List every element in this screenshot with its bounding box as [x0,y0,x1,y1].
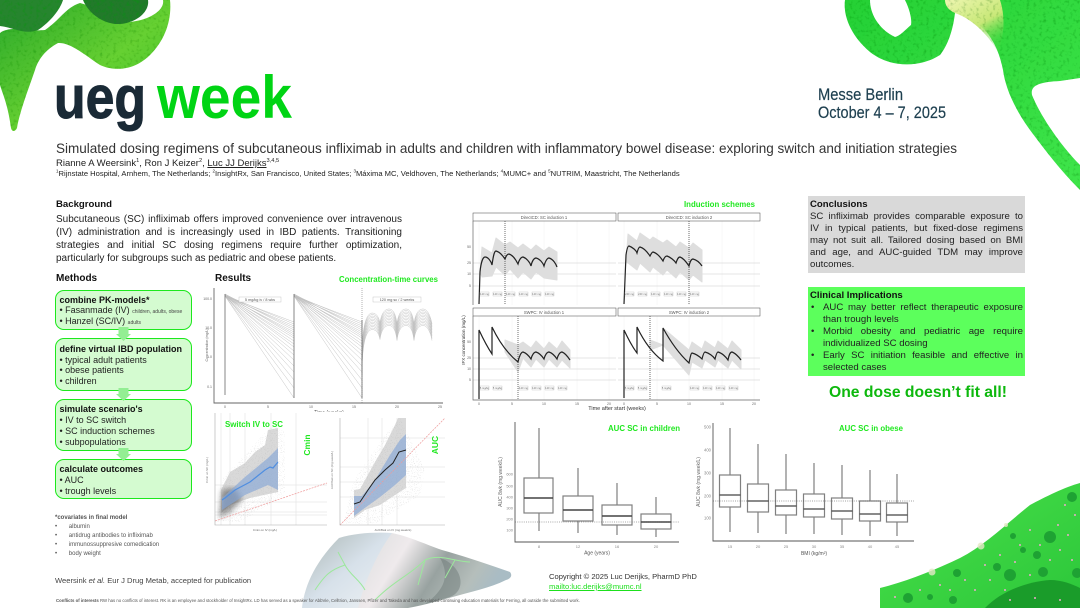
chart: induction schemes: 10 [542,402,546,406]
chart: induction schemes: 120 mg [532,386,541,390]
chart: induction schemes: 120 mg [690,292,699,296]
method step: combine PK-models: combine PK-models* [60,295,150,305]
decoration: top-left green form [0,0,170,131]
chart: induction schemes: 10 [687,402,691,406]
chart: concentration-time curves: 25 [438,405,442,409]
chart: induction schemes: 15 [720,402,724,406]
panel: clinical implications: • [811,350,814,361]
chart: induction schemes: 240 mg [638,292,647,296]
chart: induction schemes: 120 mg [729,386,738,390]
chart: induction schemes: 15 [575,402,579,406]
chart: induction schemes: 120 mg [716,386,725,390]
panel: background: Background [56,199,112,210]
citation: Weersink et al. Eur J Drug Metab, accepted for publication [55,576,251,585]
covariates note: *covariates in final model [55,515,127,521]
chart: induction schemes: 25 [467,356,471,360]
chart: induction schemes: 120 mg [664,292,673,296]
panel: clinical implications: individualized SC dosing [823,338,928,349]
chart: concentration-time curves: Concentration (mg/L) [205,329,209,361]
panel: background: Subcutaneous (SC) infliximab offers improved convenience over intravenous [56,214,402,224]
method step: combine PK-models: • Hanzel (SC/IV) adults [60,316,141,326]
chart: AUC SC in children boxplot: 500 [506,484,514,488]
tagline: One dose doesn’t fit all! [829,384,1007,401]
method step: simulate scenarios: • SC induction schemes [60,426,155,436]
panel: conclusions: and age, and AUC-guided TDM may improve [810,247,1023,258]
chart: AUC SC in obese boxplot: AUC 8wk (mg.week/L) [696,457,702,507]
chart: AUC SC in children boxplot: 400 [506,494,514,500]
panel: conclusions: IV in typical patients, but fixed-dose regimens [810,223,1023,234]
method step: calculate outcomes: • trough levels [60,486,116,496]
chart: induction schemes: Time after start (weeks) [588,406,646,412]
panel: background [56,199,402,264]
chart: concentration-time curves: Time (weeks) [314,410,344,416]
chart: induction schemes: 5 mg/kg [662,386,672,390]
chart: Cmin scatter [205,413,327,532]
chart: induction schemes: 5 mg/kg [480,386,490,390]
label: AUC SC in obese: AUC SC in obese [839,424,904,433]
chart: induction schemes: 50 [467,245,471,249]
method step: simulate scenarios: • subpopulations [60,437,126,447]
copyright: Copyright © 2025 Luc Derijks, PharmD PhD [549,572,697,581]
chart: AUC SC in obese boxplot: BMI (kg/m²) [801,551,827,557]
label: switch IV to SC: Switch IV to SC [225,420,283,429]
chart: induction schemes: 5 mg/kg [638,386,648,390]
chart: induction schemes: 0 [478,402,480,406]
chart: induction schemes: 0 [623,402,625,406]
chart: concentration-time curves: 120 mg sc / 2 weeks [380,298,414,302]
chart: induction schemes: DirectCD: SC induction 1 [521,215,568,220]
chart: Cmin scatter: Cmin on IV (mg/L) [253,528,277,532]
chart: induction schemes: 5 mg/kg [625,386,635,390]
chart: AUC SC in obese boxplot: 35 [840,544,845,549]
chart: induction schemes: IFX concentration (mg/L) [461,315,466,365]
panel: clinical implications: Morbid obesity and pediatric age require [823,326,1023,337]
chart: AUC SC in obese boxplot: 500 [704,424,712,430]
chart: concentration-time curves: 10 [309,405,313,409]
title: Simulated dosing regimens of subcutaneous infliximab in adults and children with inflammatory bowel disease: exploring switch and initiation strategies [56,140,957,156]
chart: AUC SC in obese boxplot: 40 [868,544,873,549]
chart: induction schemes: 10 [467,367,471,371]
panel: clinical implications [808,287,1025,376]
panel: background: strategies and initial SC dosing regimens require further optimization, [56,240,402,251]
chart: AUC SC in obese boxplot: 200 [704,494,712,498]
label: concentration-time curves: Concentration-time curves [339,275,439,284]
chart: AUC SC in obese boxplot: 45 [895,544,900,549]
decoration: bottom-right green form [880,483,1080,608]
panel: clinical implications: selected cases [823,362,886,373]
chart: induction schemes: 240 mg [625,292,634,296]
contact link: mailto:luc.derijks@mumc.nl [549,582,642,591]
chart: induction schemes: 120 mg [519,292,528,296]
chart: AUC SC in children boxplot: 20 [654,544,659,549]
chart: AUC SC in children boxplot: Age (years) [584,550,610,556]
chart: induction schemes: SWPC: IV induction 2 [669,310,710,315]
panel: conclusions [808,196,1025,273]
chart: concentration-time curves: 10.0 [205,326,212,330]
panel: clinical implications: • [811,302,814,313]
chart: induction schemes: 120 mg [532,292,541,296]
method step: define population [55,338,192,391]
venue and date: Messe Berlin [818,86,903,104]
decoration: liver illustration [302,533,511,608]
logo: ueg week: ueg [54,64,146,131]
panel: conclusions: may not suit all. Tailored dosing based on BMI [810,235,1023,246]
method step: define population: • children [60,376,97,386]
chart: AUC scatter [330,413,445,532]
panel: clinical implications: Early SC initiation feasible and effective in [823,350,1023,361]
method step: combine PK-models [55,290,192,330]
decoration: top-right green form [845,0,1080,190]
chart: AUC SC in obese boxplot: 15 [728,544,733,549]
chart: AUC SC in obese boxplot: 30 [812,544,817,549]
panel: clinical implications: • [811,326,814,337]
panel: conclusions: SC infliximab provides comparable exposure to [810,211,1023,222]
panel: clinical implications: than trough levels [823,314,899,325]
panel: clinical implications: AUC may better reflect therapeutic exposure [823,302,1023,313]
chart: induction schemes: 5 [511,402,513,406]
chart: induction schemes: 120 mg [480,292,489,296]
method step: define population: • obese patients [60,365,124,375]
chart: induction schemes: 120 mg [690,386,699,390]
chart: induction schemes: 10 [467,272,471,276]
label: Cmin: Cmin [302,434,312,456]
venue and date: October 4 – 7, 2025 [818,104,946,122]
chart: induction schemes: 5 [469,378,471,382]
chart: induction schemes: 5 [656,402,658,406]
chart: concentration-time curves [203,275,450,416]
method step: simulate scenarios: simulate scenario's [60,404,143,414]
panel: conclusions: Conclusions [810,199,868,210]
chart: induction schemes: 120 mg [545,292,554,296]
chart: induction schemes: 120 mg [677,292,686,296]
chart: AUC scatter: AUC8wk on IV (mg.week/L) [375,528,411,532]
chart: AUC SC in children boxplot: 12 [576,544,581,549]
chart: AUC SC in children boxplot: 8 [538,544,541,549]
chart: induction schemes: 5 mg/kg [493,386,503,390]
chart: Cmin scatter: Cmin on SC (mg/L) [205,457,209,483]
chart: induction schemes: 120 mg [545,386,554,390]
chart: AUC SC in obese boxplot: 20 [756,544,761,549]
heading: results: Results [215,273,251,284]
chart: AUC SC in children boxplot: 16 [615,544,620,549]
label: AUC SC in children: AUC SC in children [608,424,680,433]
chart: AUC SC in children boxplot: 100 [506,528,514,532]
chart: induction schemes: 120 mg [493,292,502,296]
chart: AUC SC in obese boxplot: 300 [704,470,712,476]
chart: concentration-time curves: 0 [224,405,226,409]
covariates note [55,514,159,557]
method step: combine PK-models: • Fasanmade (IV) children, adults, obese [60,305,182,315]
chart: induction schemes: DirectCD: SC induction 2 [666,215,713,220]
chart: concentration-time curves: 5 mg/kg iv / 8 wks [245,298,275,302]
authors: Rianne A Weersink1, Ron J Keizer2, Luc JJ Derijks3,4,5 [56,158,279,169]
chart: induction schemes: 20 [607,402,611,406]
chart: AUC SC in obese boxplot: 25 [784,544,789,549]
method step: calculate outcomes [55,459,192,499]
chart: concentration-time curves: 15 [352,405,356,409]
chart: AUC SC in obese boxplot: 400 [704,448,712,452]
method step: simulate scenarios: • IV to SC switch [60,415,126,425]
chart: AUC SC in obese boxplot [696,423,914,557]
covariates note: • immunossuppresive comedication [55,542,159,548]
chart: AUC SC in children boxplot [498,422,680,556]
panel: conclusions: outcomes. [810,259,854,270]
method step: define population: • typical adult patients [60,355,147,365]
method step: calculate outcomes: • AUC [60,475,84,485]
chart: induction schemes: 20 [752,402,756,406]
chart: AUC SC in children boxplot: AUC 8wk (mg.week/L) [498,457,504,507]
chart: concentration-time curves: 20 [395,405,399,409]
method step: simulate scenarios [55,399,192,451]
chart: AUC SC in children boxplot: 200 [506,516,514,522]
chart: AUC SC in children boxplot: 600 [506,472,514,476]
covariates note: • antidrug antibodies to infliximab [55,533,153,539]
heading: methods: Methods [56,273,97,284]
chart: induction schemes: 120 mg [506,292,515,296]
chart: concentration-time curves: 1.0 [207,355,212,359]
logo: ueg week: week [156,64,293,131]
conflicts of interest: Conflicts of interests RW has no conflicts of interest. RK is an employee and stockholder of InsightRx. LD has served as a speaker for AbbVie, Celltrion, Janssen, Pfizer and Takeda and has developed continuing education materials for Ferring, all outside the submitted work. [56,598,580,603]
chart: induction schemes: 50 [467,340,471,344]
chart: AUC SC in children boxplot: 300 [506,506,514,510]
chart: concentration-time curves: 100.0 [203,297,212,301]
chart: induction schemes: 120 mg [558,386,567,390]
panel: background: particularly for subgroups such as pediatric and obese patients. [56,253,336,264]
affiliations: 1Rijnstate Hospital, Arnhem, The Netherlands; 2InsightRx, San Francisco, United States; 3Máxima MC, Veldhoven, The Netherlands; 4MUMC+ and 5NUTRIM, Maastricht, The Netherlands [56,168,680,178]
chart: AUC SC in obese boxplot: 100 [704,516,712,520]
chart: AUC scatter: AUC8wk on SC (mg.week/L) [330,451,334,489]
method step: calculate outcomes: calculate outcomes [60,464,143,474]
chart: induction schemes: 25 [467,261,471,265]
covariates note: • albumin [55,524,90,530]
label: induction schemes: Induction schemes [684,200,756,209]
panel: clinical implications: Clinical Implications [810,290,903,301]
chart: concentration-time curves: 0.1 [207,385,212,389]
chart: induction schemes [461,200,760,412]
covariates note: • body weight [55,551,101,557]
panel: background: (IV) administration and is increasingly used in IBD patients. Transitioning [56,227,402,238]
chart: induction schemes: 120 mg [651,292,660,296]
chart: induction schemes: 5 [469,284,471,288]
chart: induction schemes: SWPC: IV induction 1 [524,310,565,315]
chart: induction schemes: 120 mg [703,386,712,390]
chart: induction schemes: 120 mg [519,386,528,390]
venue and date [818,86,946,122]
label: AUC: AUC [430,436,440,454]
method step: define population: define virtual IBD population [60,344,182,354]
chart: concentration-time curves: 5 [267,405,269,409]
